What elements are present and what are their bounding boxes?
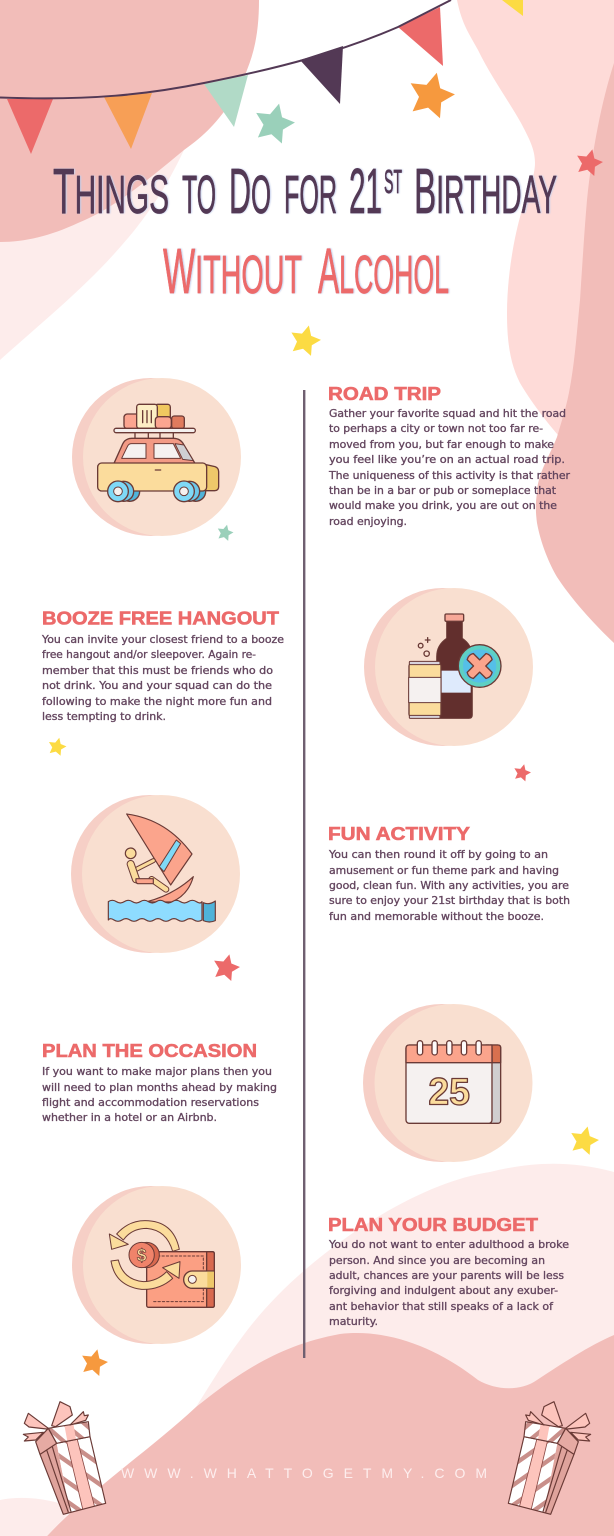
- icon circle: [82, 795, 240, 953]
- body text: maturity.: [329, 1316, 378, 1328]
- icon circle shadow: [72, 1186, 230, 1344]
- icon: windsurfer: [108, 814, 215, 922]
- bunting: [0, 0, 523, 154]
- panel: booze free icon: [364, 588, 533, 746]
- body text: following to make the night more fun and: [42, 696, 272, 708]
- body text: to perhaps a city or town not too far re-: [329, 423, 543, 435]
- body text: than be in a bar or pub or someplace that: [329, 485, 556, 497]
- body text: not drink. You and your squad can do the: [42, 680, 272, 692]
- heading: BOOZE FREE HANGOUT: [42, 608, 280, 628]
- title line 1: TO: [182, 165, 216, 225]
- body text: road enjoying.: [329, 516, 407, 528]
- body text: amusement or fun theme park and having: [329, 865, 559, 877]
- body text: You can invite your closest friend to a booze: [41, 634, 284, 646]
- body text: flight and accommodation reservations: [42, 1097, 259, 1109]
- body text: [328, 1239, 569, 1328]
- background: right dark blob: [536, 63, 614, 643]
- body text: You do not want to enter adulthood a broke: [328, 1239, 569, 1251]
- center divider: [303, 390, 305, 1358]
- panel: road trip text: [328, 383, 571, 528]
- body text: whether in a hotel or an Airbnb.: [42, 1112, 217, 1124]
- icon circle shadow: [72, 378, 230, 536]
- body text: would make you drink, you are out on the: [329, 500, 557, 512]
- title line 1: FOR: [284, 165, 337, 225]
- background: top-left dark blob: [0, 0, 259, 242]
- pennant: yellow: [502, 0, 523, 16]
- background: bottom dark blob: [47, 1333, 614, 1536]
- icon: wallet with money arrows: $: [137, 1245, 147, 1265]
- body text: member that this must be friends who do: [42, 665, 273, 677]
- star: red right: [512, 762, 532, 782]
- icon circle shadow: [71, 795, 229, 953]
- body text: sure to enjoy your 21st birthday that is both: [329, 895, 570, 907]
- body text: ant behavior that still speaks of a lack of: [329, 1301, 553, 1313]
- star: red top right: [573, 146, 605, 177]
- star: orange: [404, 67, 459, 120]
- heading: PLAN YOUR BUDGET: [328, 1214, 539, 1235]
- body text: fun and memorable without the booze.: [329, 911, 544, 923]
- title line 1: [53, 155, 557, 227]
- body text: If you want to make major plans then you: [42, 1066, 272, 1078]
- footer url: WWW.WHATTOGETMY.COM: [121, 1465, 487, 1481]
- body text: will need to plan months ahead by making: [42, 1082, 277, 1094]
- icon circle: [83, 1186, 241, 1344]
- title line 2: ALCOHOL: [318, 235, 449, 307]
- title line 1: DO: [229, 155, 271, 227]
- body text: forgiving and indulgent about any exuber-: [329, 1285, 558, 1297]
- icon: wallet with money arrows: [109, 1221, 214, 1307]
- pennant: plum: [300, 46, 343, 104]
- icon circle shadow: [363, 1004, 521, 1162]
- panel: booze free hangout text: [41, 608, 284, 723]
- panel: plan your budget text: [328, 1214, 569, 1328]
- body text: moved from you, but far enough to make: [329, 439, 554, 451]
- body text: free hangout and/or sleepover. Again re-: [42, 649, 256, 661]
- pennant: mint: [204, 75, 248, 127]
- panel: plan the occasion text: [42, 1040, 277, 1124]
- title: [53, 155, 557, 307]
- panel: windsurf icon: [71, 795, 240, 953]
- heading: PLAN THE OCCASION: [42, 1040, 257, 1061]
- icon circle: [375, 588, 533, 746]
- star: yellow below title: [287, 322, 324, 357]
- heading: FUN ACTIVITY: [328, 823, 471, 844]
- background: bottom light blob: [120, 1164, 614, 1536]
- body text: Gather your favorite squad and hit the road: [329, 408, 566, 420]
- title line 1: 21: [349, 155, 382, 227]
- background: right light blob: [457, 0, 614, 500]
- body text: less tempting to drink.: [42, 711, 166, 723]
- star: yellow left: [46, 736, 68, 757]
- body text: You can then round it off by going to an: [328, 849, 548, 861]
- body text: good, clean fun. With any activities, you are: [329, 880, 569, 892]
- pennant: red right: [398, 7, 443, 66]
- panel: road trip icon: [72, 378, 241, 536]
- icon: bottle, can and cross: [409, 614, 501, 718]
- body text: [328, 849, 570, 923]
- icon: car: [98, 404, 219, 502]
- star: teal small: [215, 523, 235, 542]
- background: bottom-left light blob: [0, 1498, 75, 1536]
- panel: fun activity text: [328, 823, 570, 923]
- heading: ROAD TRIP: [328, 383, 441, 404]
- body text: you feel like you’re on an actual road trip.: [329, 454, 565, 466]
- pennant: orange: [104, 93, 152, 149]
- bunting string: [0, 0, 451, 98]
- icon circle: [83, 378, 241, 536]
- title line 2: WITHOUT: [163, 235, 302, 307]
- title line 1: ST: [384, 163, 402, 200]
- body text: person. And since you are becoming an: [329, 1255, 545, 1267]
- star: red left: [210, 951, 242, 982]
- star: orange bottom: [78, 1346, 110, 1377]
- icon: calendar: 25: [428, 1070, 470, 1113]
- icon: calendar: [406, 1041, 501, 1123]
- star: teal top: [251, 99, 298, 145]
- icon: gift left: [22, 1401, 106, 1515]
- icon: gift right: [508, 1401, 592, 1515]
- pennant: red: [7, 99, 53, 154]
- body text: [42, 1066, 277, 1124]
- icon circle shadow: [364, 588, 522, 746]
- panel: wallet icon: [72, 1186, 241, 1344]
- body text: The uniqueness of this activity is that rather: [328, 470, 571, 482]
- body text: [328, 408, 571, 528]
- body text: adult, chances are your parents will be less: [329, 1270, 564, 1282]
- icon circle: [374, 1004, 532, 1162]
- star: yellow right: [567, 1123, 601, 1156]
- panel: calendar icon: [363, 1004, 532, 1162]
- title line 1: THINGS: [53, 155, 169, 227]
- background: top-left light blob: [0, 150, 184, 360]
- body text: [41, 634, 284, 723]
